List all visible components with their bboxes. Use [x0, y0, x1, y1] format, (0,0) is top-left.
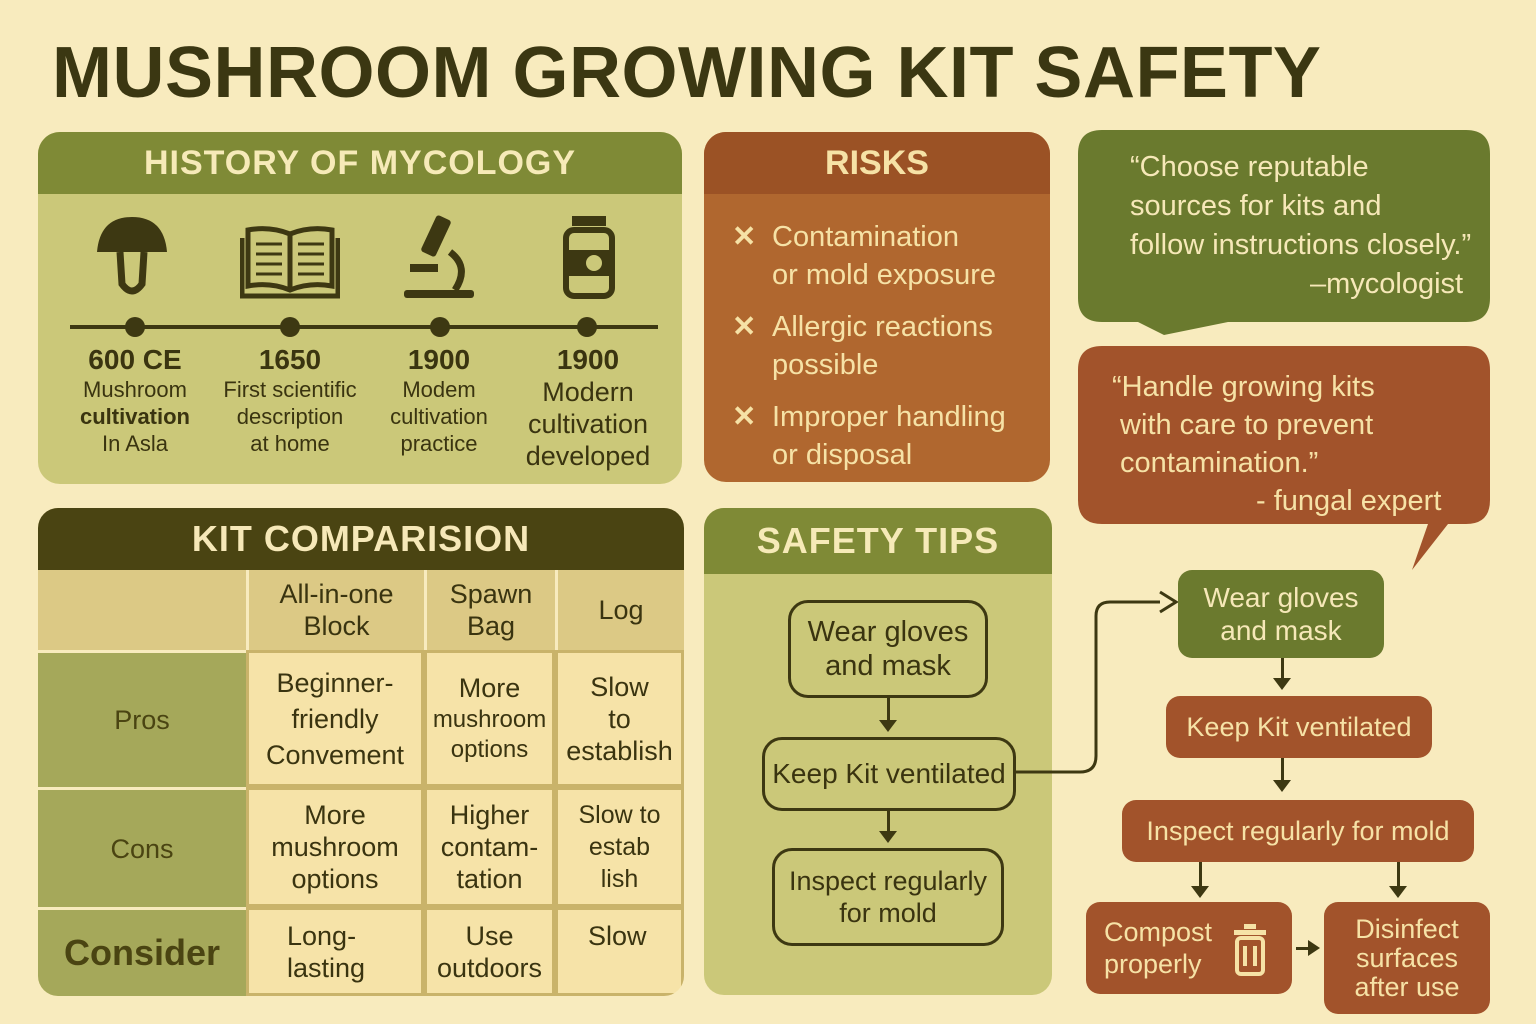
box: keep ventilated: Keep Kit ventilated: [1186, 712, 1412, 742]
box: wear gloves: [788, 600, 988, 698]
box: wear gloves: and mask: [1220, 615, 1342, 646]
icon: book: [240, 226, 340, 298]
callout: mycologist quote: –mycologist: [1310, 268, 1463, 300]
panel: safety tips: [704, 508, 1052, 995]
callout: fungal expert quote: with care to prevent: [1120, 409, 1373, 441]
text: 1900 developed: developed: [526, 441, 650, 471]
table: mushroom: [433, 706, 546, 732]
table: tation: [456, 864, 523, 894]
text: 600 CE: [80, 344, 190, 456]
text: 1900 developed: Modern: [542, 377, 634, 407]
panel: kit comparison: [38, 508, 684, 996]
text: 1900 developed: cultivation: [528, 409, 648, 439]
text: 1900 developed: 1900: [557, 344, 619, 375]
text: 1650: at home: [250, 431, 330, 456]
timeline: [70, 325, 658, 329]
callout: mycologist quote: “Choose reputable: [1130, 151, 1369, 183]
table: Spawn: [450, 579, 532, 609]
text: 1650: First scientific: [223, 377, 357, 402]
heading: safety tips: [704, 508, 1052, 574]
box: compost: properly: [1104, 949, 1202, 979]
risk list: Improper handling: [772, 401, 1006, 433]
table: More: [304, 800, 366, 830]
table: Block: [303, 611, 370, 641]
risk list: Allergic reactions: [772, 311, 993, 343]
icon: jar: [563, 216, 615, 299]
table: outdoors: [437, 953, 542, 983]
box: keep ventilated: [762, 737, 1016, 811]
box: wear gloves: Wear gloves: [808, 616, 968, 648]
table: Convement: [266, 740, 404, 770]
risk list: Contamination: [772, 221, 959, 253]
text: 1900: cultivation: [390, 404, 488, 429]
table: Bag: [467, 611, 515, 641]
box: disinfect: after use: [1354, 972, 1460, 1002]
box: compost: Compost: [1104, 917, 1212, 947]
arrow: [1296, 947, 1312, 950]
heading: history: [38, 132, 682, 194]
text: 1900: Modem: [402, 377, 476, 402]
arrow: [887, 811, 890, 839]
box: disinfect: Disinfect: [1355, 914, 1459, 944]
table: to: [608, 704, 631, 734]
text: 1650: description: [237, 404, 343, 429]
table: Slow to: [578, 801, 660, 829]
table: Use: [465, 921, 514, 951]
title: MUSHROOM GROWING KIT SAFETY: [52, 33, 1321, 113]
risk list: possible: [772, 349, 878, 381]
box: inspect: Inspect regularly for mold: [1146, 816, 1450, 846]
text: 600 CE: In Asla: [102, 431, 168, 456]
text: 1900 developed: [526, 344, 650, 471]
text: 600 CE: 600 CE: [88, 344, 182, 375]
text: 1650: [223, 344, 357, 456]
heading: safety tips: SAFETY TIPS: [757, 520, 999, 561]
heading: kit comparison: KIT COMPARISION: [192, 518, 530, 559]
risk list: or mold exposure: [772, 259, 996, 291]
heading: history: HISTORY OF MYCOLOGY: [144, 144, 576, 182]
box: wear gloves: and mask: [825, 650, 951, 682]
risk list: [732, 221, 1006, 471]
table: Slow: [590, 672, 649, 702]
table: Consider: [64, 932, 220, 973]
table: Higher: [450, 800, 529, 830]
box: wear gloves: Wear gloves: [1203, 582, 1359, 613]
callout: fungal expert quote: [1078, 346, 1490, 570]
risk list: or disposal: [772, 439, 912, 471]
panel: risks: [704, 132, 1050, 482]
text: 1900: 1900: [408, 344, 470, 375]
table: establish: [566, 736, 673, 766]
box: disinfect: surfaces: [1356, 942, 1458, 972]
table: Cons: [110, 834, 174, 864]
box: disinfect: [1324, 902, 1490, 1014]
box: compost: [1086, 902, 1292, 994]
table: [38, 570, 684, 996]
table: contam-: [441, 832, 538, 862]
risk list: ✕: [732, 221, 756, 253]
arrow: connector to flow: [1016, 590, 1178, 774]
table: More: [459, 672, 520, 702]
table: lish: [601, 865, 638, 893]
callout: fungal expert quote: “Handle growing kits: [1112, 371, 1375, 403]
panel: history of mycology: [38, 132, 682, 484]
box: inspect: Inspect regularly: [789, 866, 987, 896]
box: inspect: [772, 848, 1004, 946]
text: 600 CE: cultivation: [80, 404, 190, 429]
box: wear gloves: [1178, 570, 1384, 658]
table: Log: [598, 595, 644, 625]
box: inspect: for mold: [839, 898, 937, 928]
heading: risks: RISKS: [825, 144, 929, 182]
heading: kit comparison: [38, 508, 684, 570]
risk list: ✕: [732, 401, 756, 433]
table: Slow: [588, 921, 647, 951]
table: options: [451, 736, 528, 762]
arrow: [887, 698, 890, 728]
flowchart: right: [1086, 570, 1490, 1014]
table: mushroom: [271, 832, 399, 862]
callout: fungal expert quote: - fungal expert: [1256, 485, 1441, 517]
callout: mycologist quote: follow instructions closely.”: [1130, 229, 1471, 261]
table: All-in-one: [279, 579, 394, 609]
table: Pros: [114, 705, 170, 735]
table: options: [291, 864, 379, 894]
text: 1900: [390, 344, 488, 456]
table: friendly: [291, 704, 379, 734]
text: 600 CE: Mushroom: [83, 377, 187, 402]
callout: fungal expert quote: contamination.”: [1120, 447, 1318, 479]
icon: trash: [1234, 924, 1266, 976]
table: Long-: [287, 921, 356, 951]
icon: mushroom: [97, 217, 167, 294]
text: 1900: practice: [400, 431, 478, 456]
text: 1650: 1650: [259, 344, 321, 375]
box: keep ventilated: Keep Kit ventilated: [772, 758, 1006, 789]
callout: mycologist quote: sources for kits and: [1130, 190, 1381, 222]
table: Beginner-: [276, 668, 394, 698]
table: estab: [589, 833, 650, 861]
risk list: ✕: [732, 311, 756, 343]
icon: microscope: [404, 216, 474, 298]
box: keep ventilated: [1166, 696, 1432, 758]
box: inspect: [1122, 800, 1474, 862]
table: lasting: [287, 953, 365, 983]
heading: risks: [704, 132, 1050, 194]
callout: mycologist quote: [1078, 130, 1490, 335]
